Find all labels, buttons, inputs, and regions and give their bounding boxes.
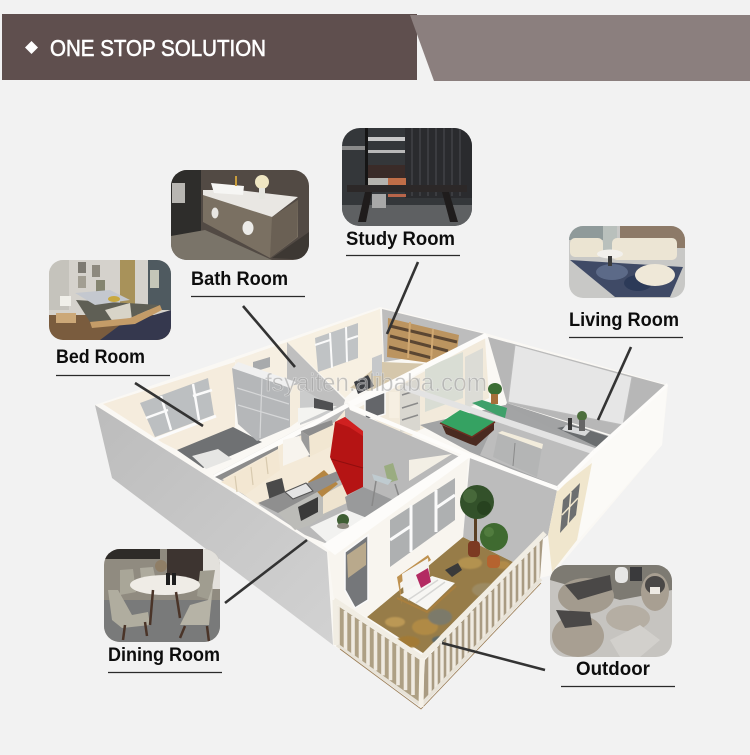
entry door wall xyxy=(350,383,668,572)
high chair xyxy=(372,463,400,506)
watermark: fsyaiten.alibaba.com xyxy=(265,369,487,397)
photo: bath room xyxy=(171,170,309,260)
bread box xyxy=(308,470,338,497)
beam across room xyxy=(405,385,595,454)
arrow: dining room pointer xyxy=(225,540,307,603)
photo: living room xyxy=(569,226,685,298)
3D apartment floor plan xyxy=(95,307,668,709)
balcony door xyxy=(345,535,368,608)
balcony floor xyxy=(367,537,513,653)
right room with whiteboard xyxy=(488,337,665,452)
potted plants xyxy=(460,485,508,568)
wall with window and door xyxy=(322,452,470,617)
arrow: bed room pointer xyxy=(135,383,203,426)
plant xyxy=(488,383,502,404)
label: bath room: Bath Room xyxy=(191,269,288,290)
range hood xyxy=(283,436,310,466)
balcony back wall xyxy=(463,458,557,562)
photo: outdoor xyxy=(550,565,672,657)
photo: bed room xyxy=(49,260,171,340)
red fridge xyxy=(330,417,363,495)
corner cabinet xyxy=(301,420,334,457)
coffee machine xyxy=(266,478,286,502)
upper wall cabinets xyxy=(221,450,280,495)
label: bath room xyxy=(191,269,305,296)
billiard table xyxy=(440,410,495,446)
small billiard table xyxy=(472,400,507,418)
counter xyxy=(258,468,347,513)
lower cabinets and oven xyxy=(278,475,347,530)
cabinet xyxy=(493,433,542,477)
photo: dining room xyxy=(104,549,220,642)
label: dining room: Dining Room xyxy=(108,645,220,666)
label: study room: Study Room xyxy=(346,229,455,250)
arrow: study room pointer xyxy=(387,262,418,334)
study front wall and shelf xyxy=(348,333,489,440)
arrow: living room pointer xyxy=(598,347,631,420)
arrow: bath room pointer xyxy=(243,306,295,367)
balcony railing xyxy=(334,533,545,709)
study room xyxy=(287,309,485,398)
header banner xyxy=(2,14,750,81)
photo: study room xyxy=(342,128,472,226)
arrow: outdoor pointer xyxy=(442,643,545,670)
label: bed room: Bed Room xyxy=(56,347,145,368)
balcony sofa xyxy=(397,555,462,612)
outer left wall xyxy=(95,405,333,645)
bath corridor and wardrobe xyxy=(232,342,345,441)
label: outdoor: Outdoor xyxy=(576,659,651,680)
header banner: ONE STOP SOLUTION xyxy=(50,35,266,61)
label: bed room xyxy=(56,347,170,376)
label: outdoor xyxy=(561,659,675,686)
kitchen xyxy=(213,403,460,545)
label: living room: Living Room xyxy=(569,310,679,331)
billiard room xyxy=(420,383,595,488)
dining table xyxy=(310,510,367,545)
bedroom xyxy=(103,362,262,469)
